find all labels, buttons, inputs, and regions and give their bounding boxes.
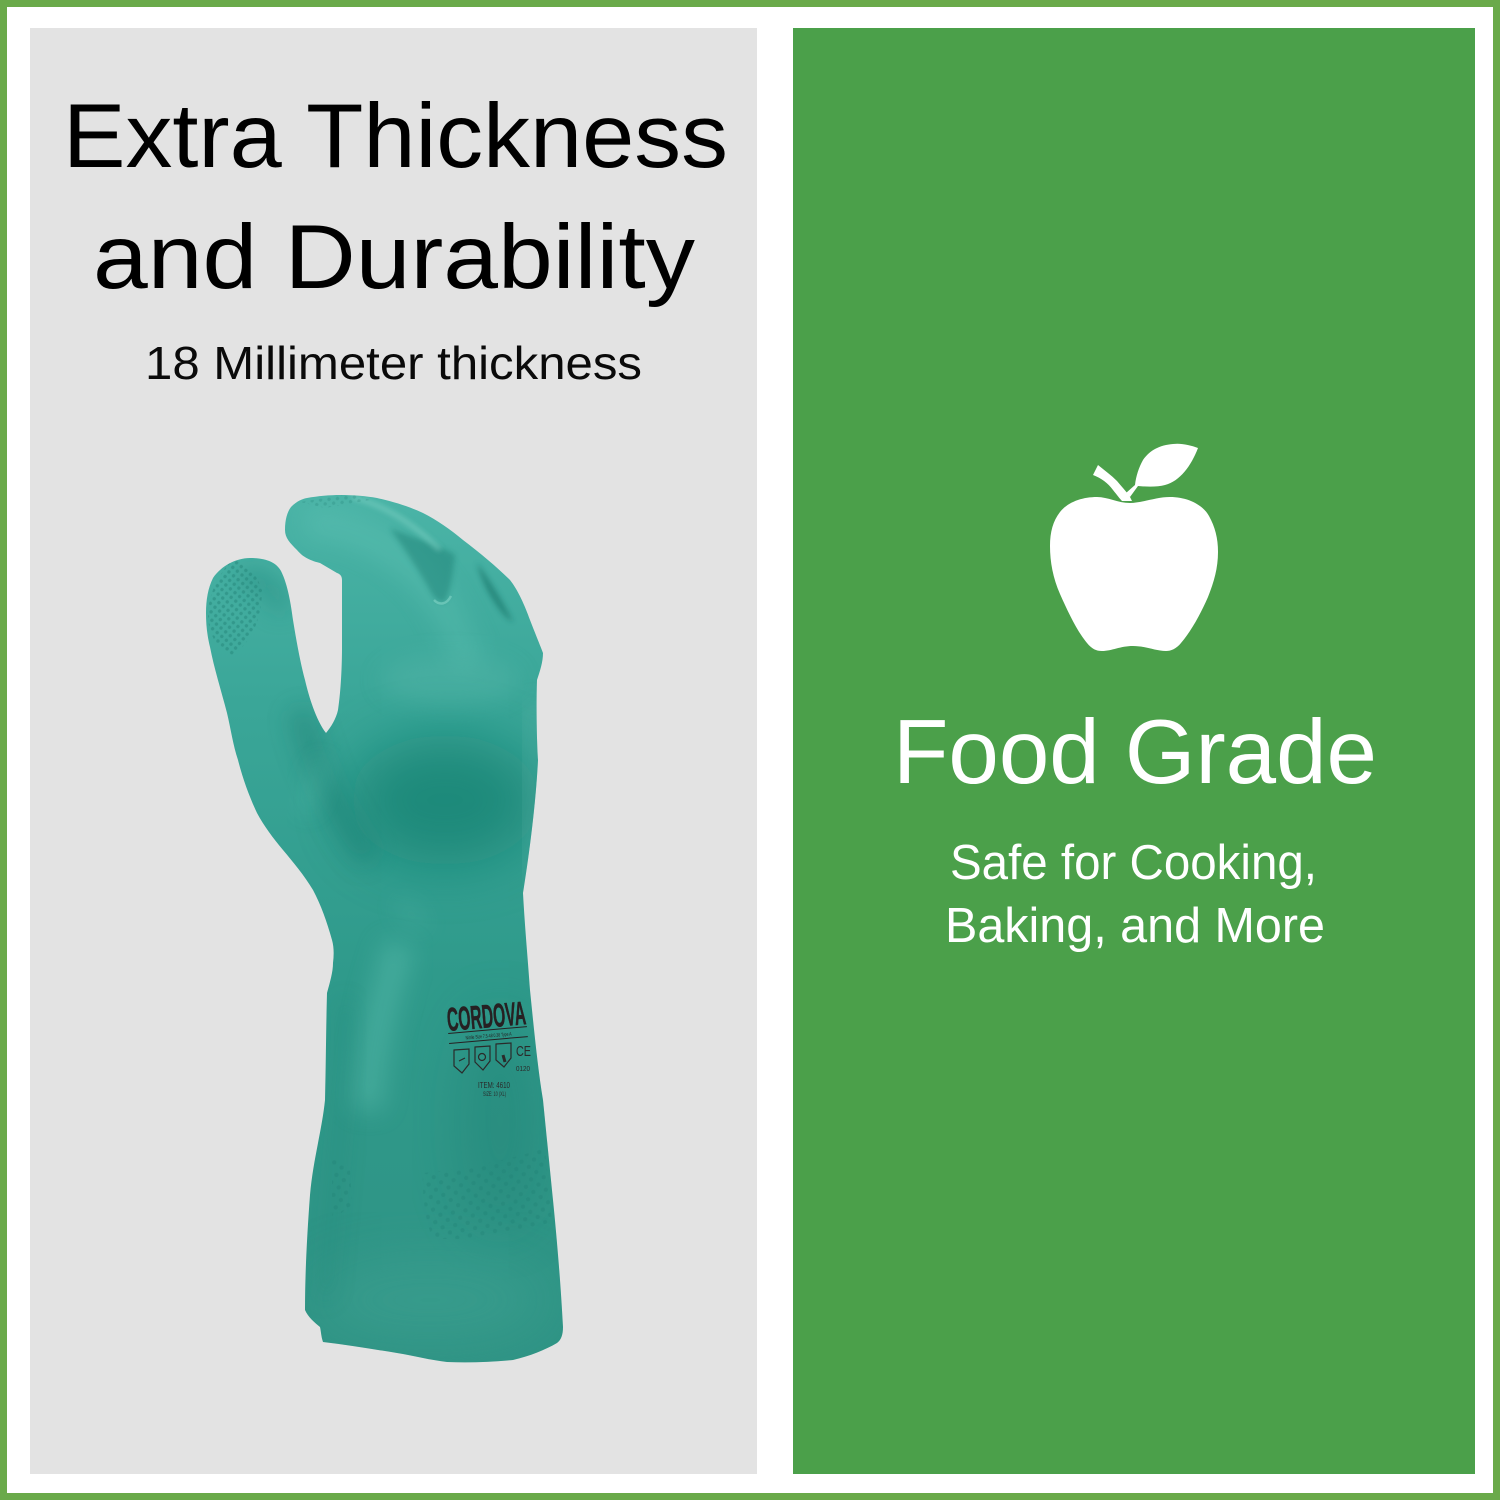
glove label fine print: CE	[516, 1043, 531, 1060]
heading: extra thickness and durability: and Durability	[93, 207, 696, 308]
finger creases	[390, 528, 455, 602]
thumb grip texture	[208, 560, 262, 655]
glove label: CORDOVA: CORDOVA	[445, 994, 527, 1038]
glove label fine print: SIZE: 10 (XL)	[483, 1092, 506, 1098]
heading: food grade: Food Grade	[893, 702, 1377, 803]
heading: extra thickness and durability: Extra Thickness	[63, 86, 728, 187]
cuff grip texture	[423, 1148, 552, 1239]
glove label fine print: 0120	[516, 1066, 530, 1073]
glove label: CORDOVA	[445, 994, 531, 1098]
subheading: thickness: 18 Millimeter thickness	[145, 337, 642, 389]
icons: safety shields	[454, 1043, 511, 1073]
heading: extra thickness and durability	[63, 86, 728, 308]
image: green nitrile glove	[206, 495, 563, 1362]
glove label fine print	[478, 1043, 531, 1098]
fingertip grip texture	[302, 496, 369, 508]
glove label: CORDOVA: Nitrile Size 7.5-48 0.38 Type A	[465, 1031, 512, 1041]
panel: food grade	[793, 28, 1475, 1474]
icon: apple	[1050, 444, 1218, 651]
shading	[350, 735, 540, 865]
glove label fine print: ITEM: 4610	[478, 1081, 510, 1090]
text: safe for cooking, baking, and more: Safe for Cooking,	[950, 836, 1317, 890]
text: safe for cooking, baking, and more: Baking, and More	[945, 899, 1325, 953]
panel: extra thickness and durability	[30, 28, 757, 1474]
text: safe for cooking, baking, and more	[945, 836, 1325, 953]
